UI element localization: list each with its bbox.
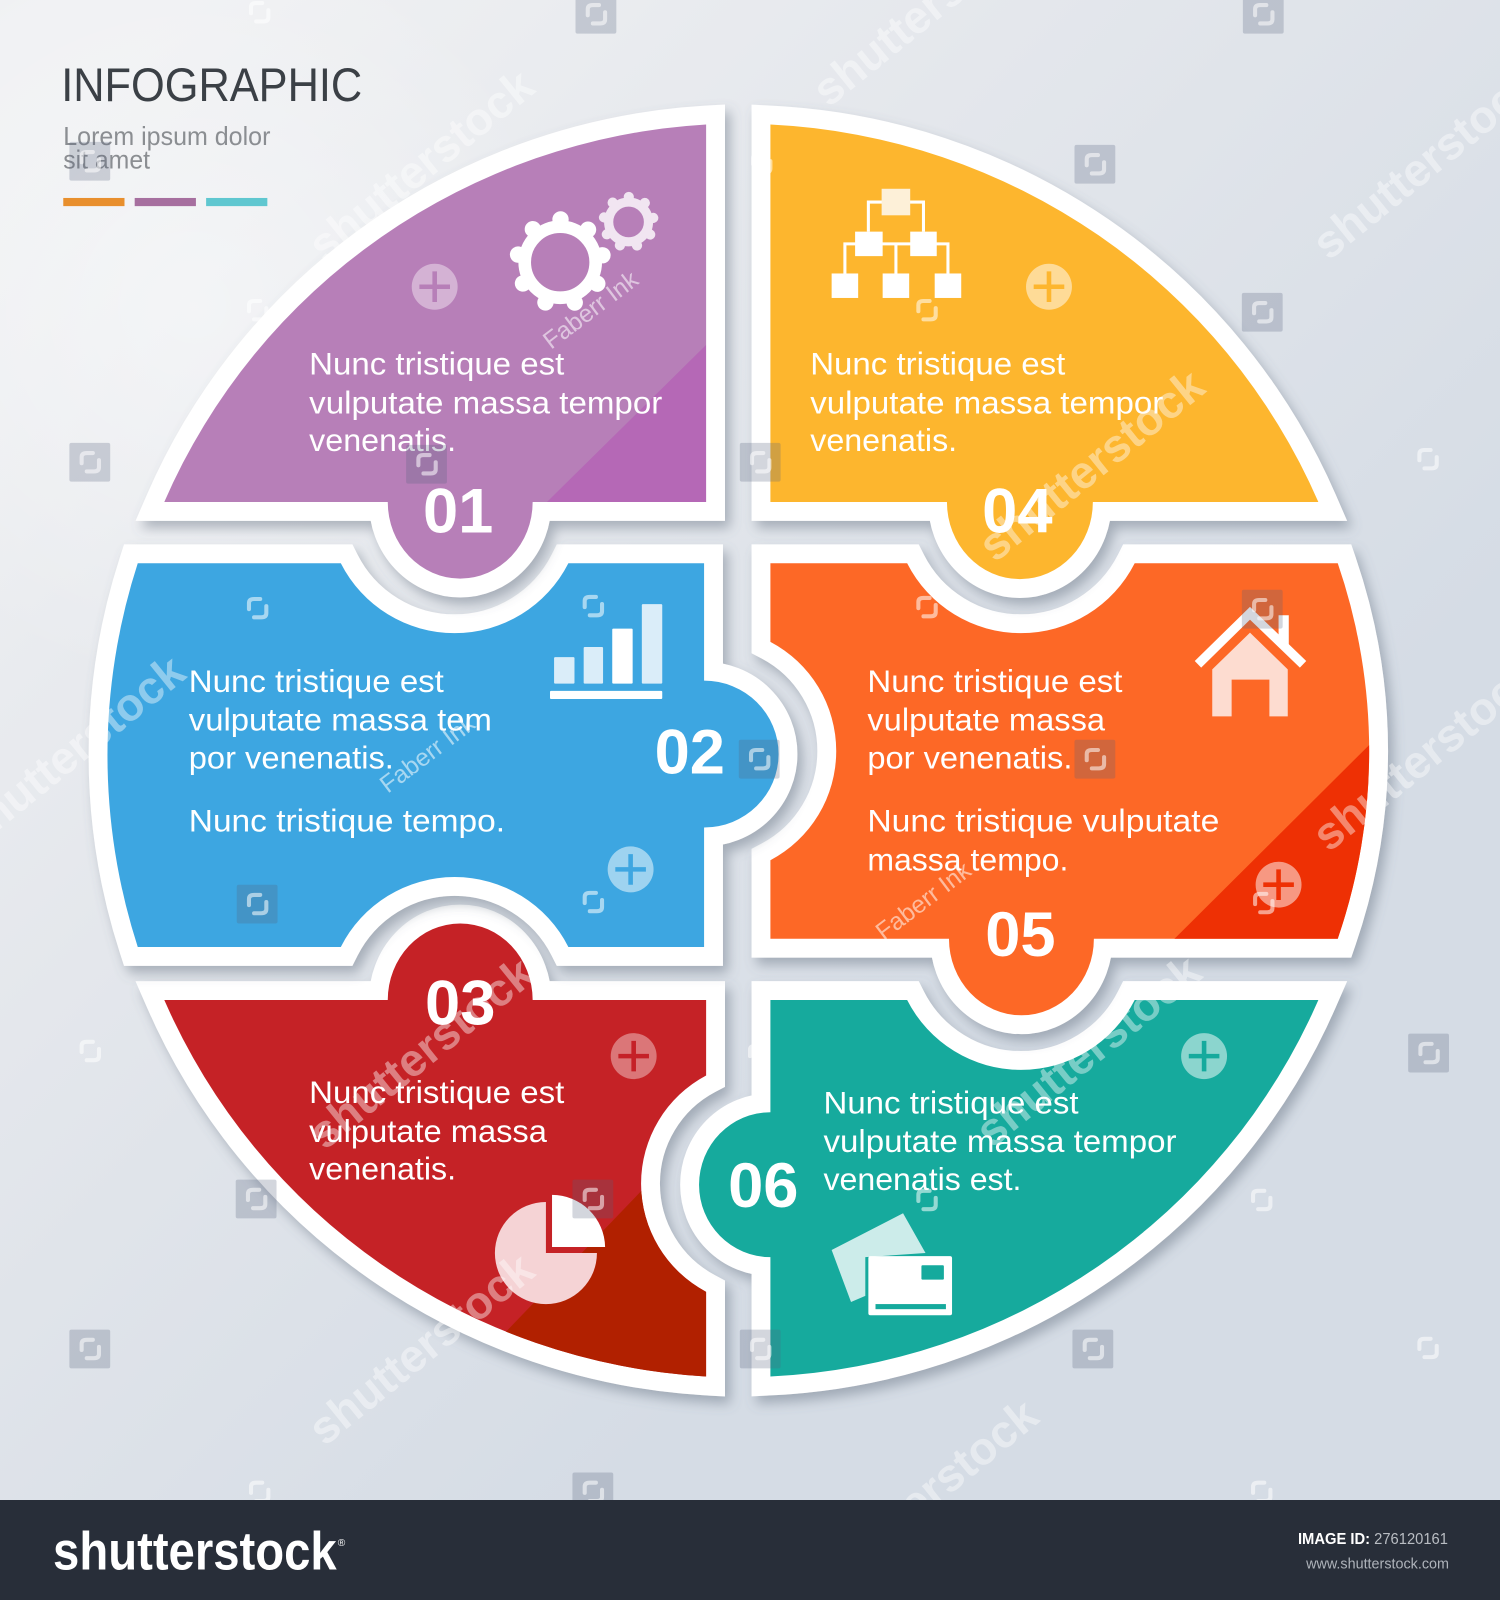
text block (823, 1084, 1177, 1197)
plus button (1181, 1033, 1227, 1079)
plus button (1026, 264, 1072, 310)
watermarks: shutterstock (298, 946, 544, 1159)
icon: gears (517, 197, 654, 305)
panel 04: yellow (770, 124, 1318, 579)
text block: por venenatis. (867, 739, 1072, 775)
watermarks: shutterstock (298, 1242, 544, 1455)
watermarks: Faberr Ink (375, 710, 481, 799)
text block: Nunc tristique est (309, 345, 565, 381)
text block: venenatis est. (823, 1161, 1021, 1197)
text block: Nunc tristique est (309, 1074, 565, 1110)
panel 03: red (164, 923, 714, 1429)
watermarks: shutterstock (968, 358, 1214, 571)
text block: vulputate massa tempor (309, 384, 662, 420)
number 02: 02 (655, 717, 725, 787)
plus button (611, 1033, 657, 1079)
text block: Nunc tristique est (189, 663, 444, 699)
text block: por venenatis. (189, 739, 394, 775)
text block: vulputate massa tempor (823, 1123, 1177, 1159)
text block: Nunc tristique est (823, 1084, 1079, 1120)
footer bar (0, 1500, 1500, 1600)
panel 05: orange (770, 563, 1388, 1015)
subtitle: Lorem ipsum dolor (63, 123, 271, 151)
text block: venenatis. (309, 1151, 456, 1187)
text block (309, 345, 662, 458)
text block (867, 663, 1219, 877)
text block: vulputate massa (309, 1113, 547, 1149)
icon: credit cards (832, 1213, 952, 1315)
title: INFOGRAPHIC (61, 59, 362, 111)
site url: www.shutterstock.com (1305, 1556, 1449, 1572)
text block: venenatis. (810, 422, 957, 458)
text block: vulputate massa tem (189, 702, 492, 738)
text block: venenatis. (309, 422, 456, 458)
subtitle (63, 123, 271, 174)
icon: house (1198, 613, 1303, 716)
title block (61, 59, 362, 206)
footer wordmark: shutterstock (53, 1521, 338, 1581)
watermarks: Faberr Ink (538, 266, 644, 355)
number 05: 05 (985, 900, 1056, 970)
number 03: 03 (425, 968, 495, 1038)
text block: vulputate massa tempor (810, 384, 1163, 420)
subtitle: sit amet (63, 146, 150, 174)
plus button (608, 846, 654, 892)
text block: Nunc tristique est (867, 663, 1123, 699)
plus button (412, 264, 458, 310)
text block (810, 345, 1163, 458)
icon: org chart (832, 189, 961, 298)
panel 01: purple (164, 124, 706, 579)
text block: Nunc tristique est (810, 345, 1066, 381)
text block: Nunc tristique tempo. (189, 803, 505, 839)
watermarks: shutterstock (965, 944, 1211, 1157)
icon: pie chart (495, 1195, 605, 1304)
image id: IMAGE ID: 276120161 (1298, 1531, 1448, 1548)
number 01: 01 (423, 477, 493, 547)
icon: bar chart (550, 604, 662, 699)
text block: Nunc tristique vulputate (867, 803, 1219, 839)
watermarks: shutterstock (298, 58, 544, 271)
registered mark: ® (338, 1538, 346, 1549)
number 06: 06 (728, 1151, 798, 1221)
colour legend bars (63, 198, 267, 206)
text block: massa tempo. (867, 841, 1068, 877)
text block (309, 1074, 565, 1187)
plus button (1256, 862, 1302, 908)
panel 02: blue (107, 563, 779, 947)
text block (189, 663, 505, 839)
number 04: 04 (982, 477, 1053, 547)
panel 06: teal (699, 1000, 1318, 1377)
text block: vulputate massa (867, 702, 1106, 738)
watermarks: shutterstock (802, 1388, 1048, 1600)
watermarks: Faberr Ink (871, 856, 977, 946)
